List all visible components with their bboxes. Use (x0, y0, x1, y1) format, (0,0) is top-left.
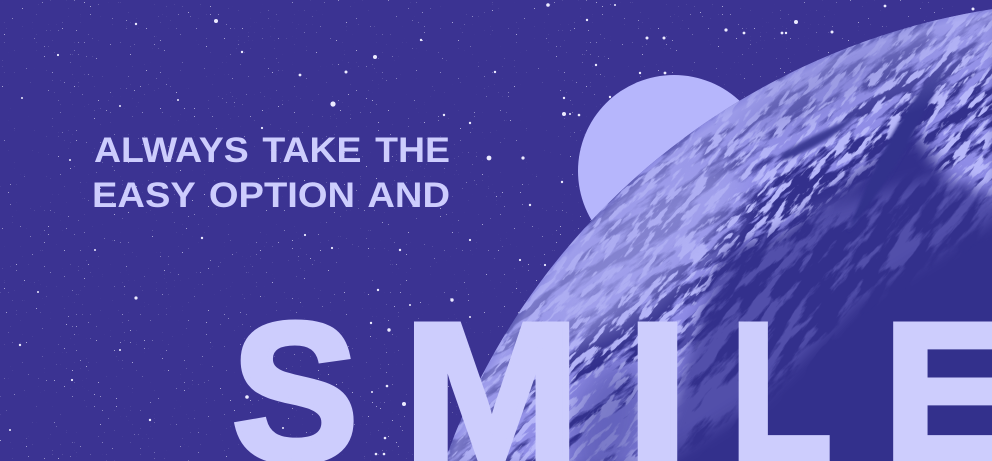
heading: always take the easy option and: ALWAYS TAKE THE (94, 130, 450, 170)
planet earth (448, 9, 992, 461)
moon (578, 75, 770, 267)
heading: always take the easy option and (92, 130, 450, 215)
heading: smile (232, 281, 992, 461)
heading: always take the easy option and: EASY OPTION AND (92, 175, 450, 215)
